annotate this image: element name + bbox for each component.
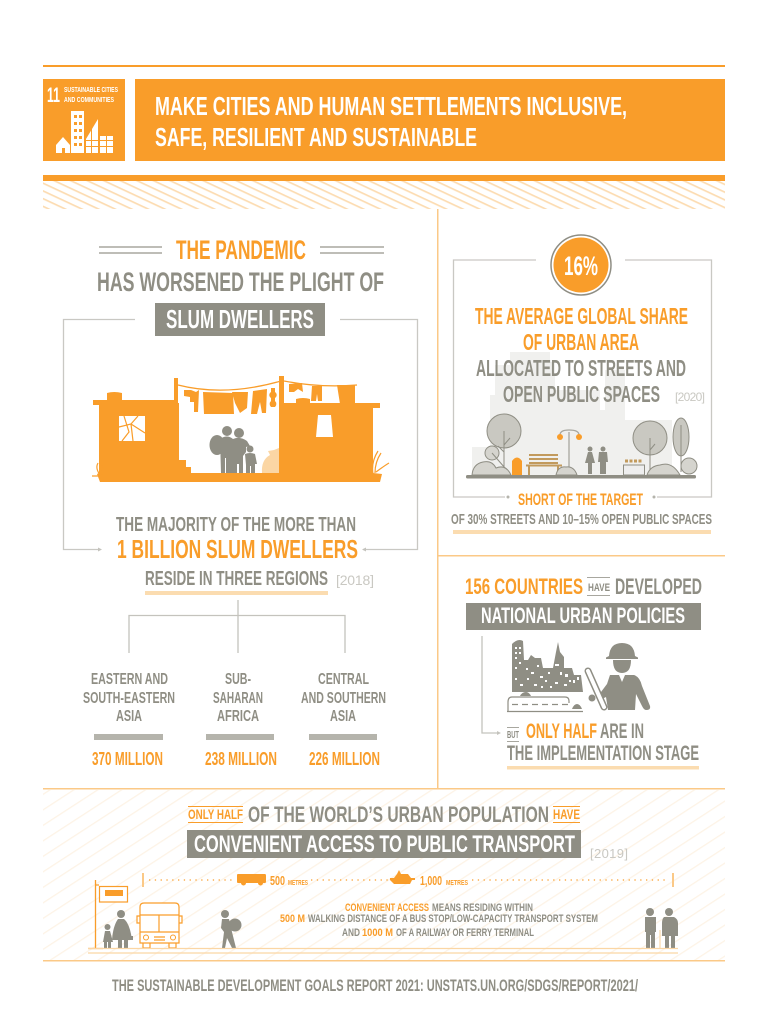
text: only half in implementation: BUT — [507, 730, 519, 741]
region: Central and Southern Asia — [301, 671, 386, 769]
text: average global share: [2020] — [675, 390, 705, 404]
panel: slum dwellers — [64, 235, 418, 769]
region: Sub-Saharan Africa: SAHARAN — [213, 690, 263, 707]
text: majority of slum dwellers: 1 BILLION SLUM DWELLERS — [117, 534, 358, 564]
region: Eastern and South-Eastern Asia: EASTERN AND — [91, 671, 168, 688]
text: convenient access definition: 500 M — [280, 913, 305, 925]
heading: the pandemic: HAS WORSENED THE PLIGHT OF — [97, 267, 384, 297]
text: majority of slum dwellers: THE MAJORITY OF THE MORE THAN — [116, 514, 356, 536]
text: convenient access definition: 1000 M — [362, 927, 393, 939]
text: convenient access definition: MEANS RESIDING WITHIN — [432, 902, 533, 914]
icon: walking person with backpack — [221, 910, 242, 948]
SDG 11 tile: AND COMMUNITIES — [64, 97, 114, 104]
text: majority of slum dwellers: RESIDE IN THREE REGIONS — [145, 568, 328, 590]
text: convenient access definition: WALKING DISTANCE OF A BUS STOP/LOW-CAPACITY TRANSPORT SYSTEM — [308, 913, 598, 925]
region: Sub-Saharan Africa: AFRICA — [217, 708, 259, 725]
text: short of the target: SHORT OF THE TARGET — [518, 490, 643, 509]
heading: convenient access: ONLY HALF — [188, 806, 243, 822]
icon: bus — [237, 874, 266, 886]
icon: ferry — [390, 870, 415, 884]
icon: bus stop and bus — [88, 880, 182, 948]
distance scale: 1,000 — [420, 873, 442, 888]
header title banner: SAFE, RESILIENT AND SUSTAINABLE — [155, 122, 477, 152]
heading: convenient access — [187, 802, 628, 861]
distance scale: METRES — [288, 880, 308, 887]
region: Central and Southern Asia: ASIA — [330, 708, 356, 725]
heading: convenient access: [2019] — [590, 846, 628, 861]
illustration: park — [466, 352, 697, 478]
SDG 11 tile: SUSTAINABLE CITIES — [64, 87, 118, 94]
icon: slum houses — [92, 376, 389, 482]
heading: 156 countries: 156 COUNTRIES — [465, 574, 583, 599]
region: Central and Southern Asia: 226 MILLION — [309, 749, 380, 769]
heading: convenient access: CONVENIENT ACCESS TO PUBLIC TRANSPORT — [194, 831, 575, 858]
region: Central and Southern Asia: AND SOUTHERN — [301, 690, 386, 707]
text: average global share: OF URBAN AREA — [523, 329, 639, 355]
region: Sub-Saharan Africa: 238 MILLION — [205, 749, 277, 769]
region: Eastern and South-Eastern Asia — [83, 671, 175, 769]
icon: engineer with plans — [588, 643, 650, 710]
SDG 11 tile: 11 — [47, 84, 60, 107]
text: majority of slum dwellers: [2018] — [336, 572, 374, 588]
heading: the pandemic — [97, 235, 384, 336]
heading: 156 countries — [465, 574, 702, 630]
text: majority of slum dwellers — [116, 514, 374, 595]
region: Eastern and South-Eastern Asia: SOUTH-EASTERN — [83, 690, 175, 707]
icon: older couple — [645, 908, 678, 948]
text: convenient access definition: OF A RAILWAY OR FERRY TERMINAL — [396, 927, 534, 939]
heading: 156 countries: HAVE — [588, 582, 610, 594]
text: average global share — [475, 303, 705, 407]
text: convenient access definition: AND — [342, 927, 360, 939]
text: only half in implementation: ONLY HALF — [526, 720, 597, 743]
region: Sub-Saharan Africa — [205, 671, 277, 769]
panel: public spaces — [451, 235, 712, 534]
text: convenient access definition — [280, 902, 598, 939]
distance scale: METRES — [446, 880, 468, 887]
header — [43, 65, 725, 209]
header title banner — [135, 79, 725, 161]
stat badge: 16% — [551, 235, 611, 295]
heading: 156 countries: DEVELOPED — [615, 574, 702, 599]
region: Eastern and South-Eastern Asia: ASIA — [116, 708, 142, 725]
heading: convenient access: OF THE WORLD’S URBAN POPULATION — [248, 802, 549, 827]
distance scale: 500 — [270, 873, 285, 888]
text: short of the target — [451, 490, 712, 534]
SDG 11 tile — [43, 79, 125, 161]
distance scale — [143, 870, 673, 888]
heading: convenient access: HAVE — [553, 806, 580, 822]
text: average global share: OPEN PUBLIC SPACES — [503, 381, 660, 407]
panel: public transport — [43, 790, 725, 962]
heading: the pandemic: SLUM DWELLERS — [166, 304, 314, 334]
text: only half in implementation — [507, 720, 699, 770]
text: convenient access definition: CONVENIENT ACCESS — [345, 902, 429, 914]
icon: city skyline — [507, 640, 583, 712]
text: only half in implementation: ARE IN — [600, 720, 644, 743]
panel: national urban policies — [465, 574, 702, 770]
heading: the pandemic: THE PANDEMIC — [176, 235, 306, 265]
region: Central and Southern Asia: CENTRAL — [318, 671, 369, 688]
stat badge: 16%: 16% — [564, 251, 598, 281]
region: Eastern and South-Eastern Asia: 370 MILLION — [92, 749, 163, 769]
region: Sub-Saharan Africa: SUB- — [225, 671, 251, 688]
